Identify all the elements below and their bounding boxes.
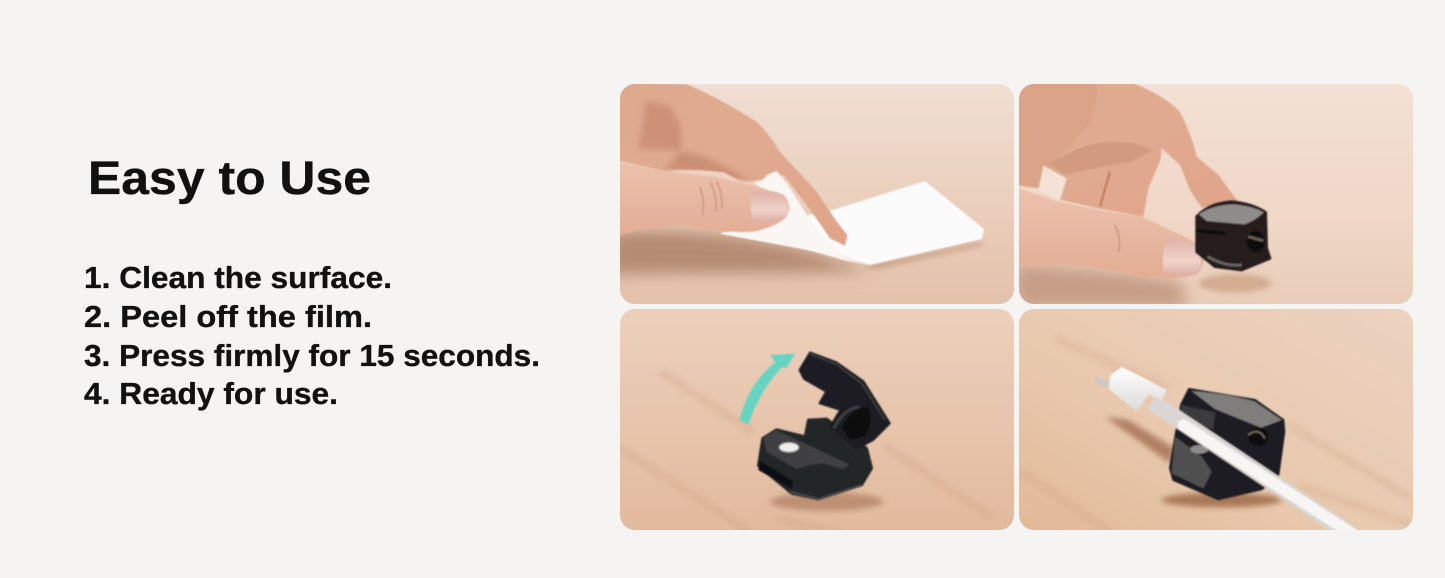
panel: open holder photo <box>620 309 1014 535</box>
thumb <box>617 161 789 236</box>
holder base <box>758 419 872 499</box>
holder hinged lid <box>799 352 890 449</box>
holder <box>1170 389 1284 499</box>
panel: cable in holder photo <box>1019 309 1413 535</box>
wood grain <box>620 372 993 535</box>
flat white film <box>720 181 984 265</box>
step 2: 2. Peel off the film. <box>84 299 372 334</box>
infographic canvas <box>84 84 1413 530</box>
teal arrow <box>739 354 795 424</box>
wood grain <box>1056 337 1411 527</box>
panel: peel film photo <box>610 82 1014 304</box>
holder shadow <box>770 492 883 511</box>
title: Easy to Use <box>88 151 371 204</box>
step 1: 1. Clean the surface. <box>84 260 392 295</box>
step 3: 3. Press firmly for 15 seconds. <box>84 338 540 373</box>
table shadow <box>1019 264 1192 304</box>
hand shadow on table <box>610 230 870 275</box>
step 4: 4. Ready for use. <box>84 376 338 411</box>
peeled film curl <box>720 171 870 265</box>
USB-C cable <box>1152 402 1352 535</box>
cable holder <box>1197 202 1270 270</box>
panel: press holder photo <box>1015 82 1413 308</box>
cable shadow <box>1105 417 1175 463</box>
hand <box>1015 82 1238 278</box>
hand <box>617 82 847 246</box>
steps list <box>84 260 540 411</box>
